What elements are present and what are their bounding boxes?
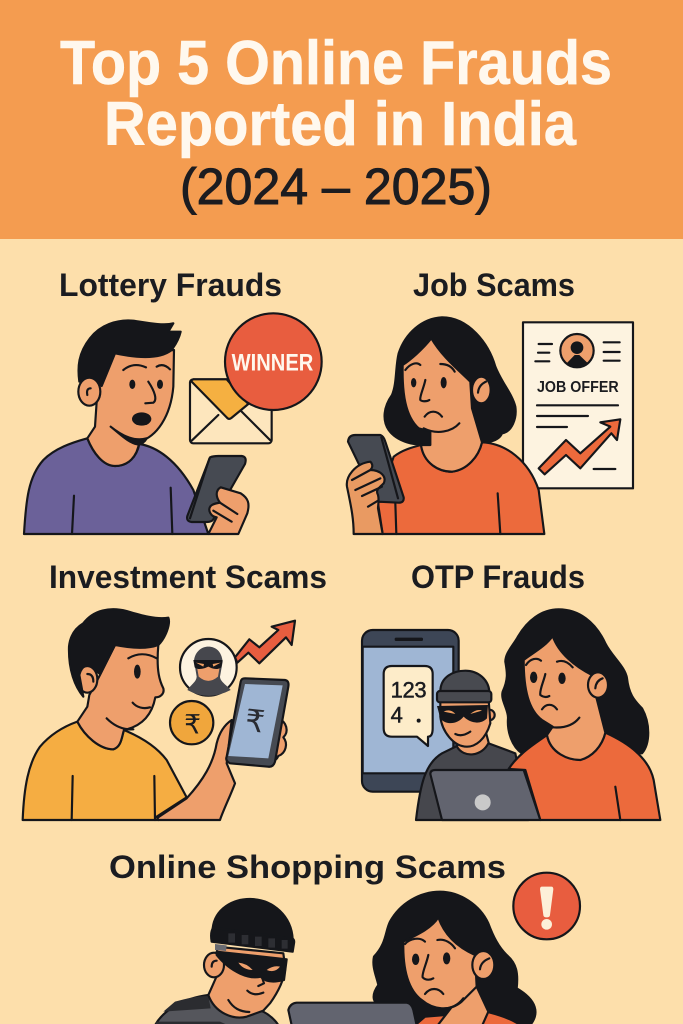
heading: lottery frauds: Lottery Frauds: [59, 267, 282, 303]
document: job offer: JOB OFFER: [537, 379, 619, 396]
heading: job scams: Job Scams: [413, 267, 575, 303]
illustration: scammer and worried shopper: [155, 873, 580, 1024]
panel: online shopping scams: [109, 849, 580, 1024]
icon: phone showing otp: [362, 630, 459, 792]
icon: phone: [187, 456, 246, 522]
icon: winner badge: WINNER: [232, 350, 313, 377]
figure: man: [23, 609, 235, 820]
icon: rupee coin: ₹: [184, 709, 201, 740]
speech bubble: otp digits: 4: [391, 702, 403, 727]
icon: winner badge: [225, 313, 322, 410]
figure: woman: [502, 609, 660, 820]
heading: online shopping scams: Online Shopping Scams: [109, 849, 506, 885]
heading: otp frauds: OTP Frauds: [411, 559, 585, 595]
illustration: man with phone and fake investment: [23, 609, 295, 820]
title: Reported in India: [104, 90, 576, 159]
laptop: [288, 1003, 417, 1024]
heading: investment scams: Investment Scams: [49, 559, 327, 595]
title: [60, 29, 612, 159]
figure: shopper: [373, 892, 535, 1024]
title: Top 5 Online Frauds: [60, 29, 612, 98]
icon: scammer avatar: [180, 639, 237, 696]
figure: woman: [378, 317, 544, 534]
panel: investment scams: [23, 559, 327, 820]
icon: alert badge: [513, 873, 580, 939]
hand: [347, 462, 385, 534]
arrow: rising trend: [235, 621, 295, 663]
header banner: [0, 0, 683, 239]
subtitle: years: (2024 – 2025): [180, 158, 492, 215]
panel: lottery frauds: [24, 267, 322, 534]
icon: envelope: [190, 379, 272, 443]
speech bubble: otp digits: 123: [391, 678, 427, 703]
illustration: man with phone and winner message: [24, 313, 322, 534]
figure: scammer with laptop: [416, 671, 540, 820]
illustration: woman with phone and job offer: [347, 317, 633, 534]
icon: phone: [348, 435, 404, 503]
panel: otp frauds: [362, 559, 660, 820]
figure: man: [24, 320, 208, 534]
icon: phone with rupee: [226, 678, 289, 767]
icon: phone with rupee: ₹: [243, 704, 266, 741]
speech bubble: otp digits: [384, 666, 433, 746]
panel: job scams: [347, 267, 633, 534]
document: job offer: [523, 322, 633, 488]
icon: rupee coin: [170, 701, 213, 744]
illustration: scammer reads otp, woman worried: [362, 609, 660, 820]
figure: scammer: [155, 899, 294, 1024]
hand: [208, 487, 249, 534]
